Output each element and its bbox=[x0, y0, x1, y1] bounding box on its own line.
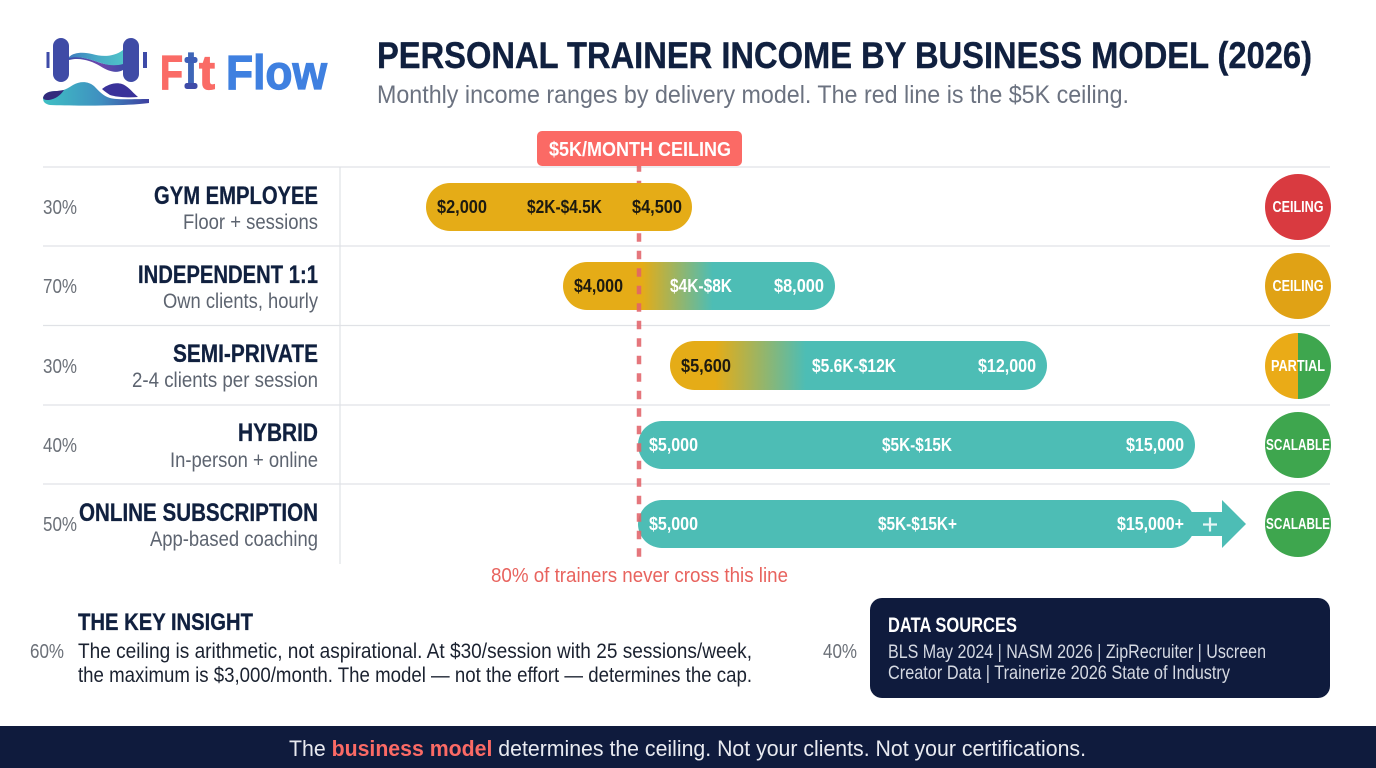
row label bbox=[170, 419, 318, 472]
income bar bbox=[563, 262, 835, 310]
insight body bbox=[78, 640, 752, 687]
row label: SEMI-PRIVATE bbox=[173, 340, 318, 368]
footer banner: The business model determines the ceiling. Not your clients. Not your certifications. bbox=[289, 736, 1086, 761]
row label bbox=[79, 499, 318, 551]
income bar bbox=[638, 421, 1195, 469]
income bar: $4,000 bbox=[574, 275, 623, 296]
income bar: $5K-$15K bbox=[882, 434, 953, 455]
status badge: CEILING bbox=[1272, 199, 1324, 216]
income bar: $5,600 bbox=[681, 355, 731, 376]
income bar bbox=[670, 341, 1047, 390]
logo wordmark: i bbox=[186, 46, 196, 99]
ceiling line bbox=[637, 163, 641, 557]
row label: In-person + online bbox=[170, 449, 318, 472]
percent: 70% bbox=[43, 276, 77, 298]
logo wordmark: Flow bbox=[226, 47, 328, 100]
row label: App-based coaching bbox=[150, 528, 318, 551]
icon: dumbbell with flow waves bbox=[43, 38, 149, 106]
status badge bbox=[1265, 174, 1331, 240]
percent: 30% bbox=[43, 197, 77, 219]
income bar with arrow: $5,000 bbox=[649, 513, 698, 534]
logo: FitFlow bbox=[43, 38, 328, 106]
percent: 50% bbox=[43, 514, 77, 536]
row label bbox=[138, 261, 318, 313]
income bar with arrow bbox=[638, 500, 1246, 548]
ceiling label: $5K/MONTH CEILING bbox=[549, 138, 731, 161]
row: hybrid bbox=[43, 412, 1331, 478]
footer banner bbox=[0, 726, 1376, 768]
income bar: $4,500 bbox=[632, 196, 682, 217]
sources percent: 40% bbox=[823, 641, 857, 663]
status badge: SCALABLE bbox=[1266, 516, 1330, 533]
ceiling note: 80% of trainers never cross this line bbox=[491, 565, 788, 587]
income bar: $2K-$4.5K bbox=[527, 196, 603, 217]
row label bbox=[132, 340, 318, 392]
row: gym employee bbox=[43, 174, 1331, 240]
panel: data sources: DATA SOURCES bbox=[888, 614, 1017, 637]
status badge bbox=[1265, 491, 1331, 557]
row: semi-private bbox=[43, 333, 1331, 399]
panel: data sources: BLS May 2024 | NASM 2026 | ZipRecruiter | Uscreen bbox=[888, 641, 1266, 663]
row label: GYM EMPLOYEE bbox=[154, 182, 318, 210]
status badge: SCALABLE bbox=[1266, 437, 1330, 454]
row: independent bbox=[43, 253, 1331, 319]
logo wordmark: t bbox=[199, 47, 215, 100]
status badge: PARTIAL bbox=[1271, 358, 1325, 375]
income bar: $15,000 bbox=[1126, 434, 1184, 455]
income bar with arrow: $5K-$15K+ bbox=[878, 513, 957, 534]
income bar: $5,000 bbox=[649, 434, 698, 455]
income bar: $2,000 bbox=[437, 196, 487, 217]
row label: Own clients, hourly bbox=[163, 290, 318, 313]
income bar: $12,000 bbox=[978, 355, 1036, 376]
income bar: $5.6K-$12K bbox=[812, 355, 897, 376]
status badge: CEILING bbox=[1272, 278, 1324, 295]
insight body: the maximum is $3,000/month. The model — not the effort — determines the cap. bbox=[78, 664, 752, 687]
row label: Floor + sessions bbox=[183, 211, 318, 234]
row label: HYBRID bbox=[238, 419, 318, 447]
panel: data sources bbox=[870, 598, 1330, 698]
status badge bbox=[1265, 412, 1331, 478]
insight body: The ceiling is arithmetic, not aspirational. At $30/session with 25 sessions/week, bbox=[78, 640, 752, 663]
income bar bbox=[426, 183, 692, 231]
income bar: $4K-$8K bbox=[670, 275, 733, 296]
row label: 2-4 clients per session bbox=[132, 369, 318, 392]
row label bbox=[154, 182, 318, 234]
percent: 30% bbox=[43, 356, 77, 378]
income bar with arrow: $15,000+ bbox=[1117, 513, 1184, 534]
status badge bbox=[1265, 333, 1331, 399]
ceiling label bbox=[537, 131, 742, 166]
insight heading: THE KEY INSIGHT bbox=[78, 609, 253, 636]
key insight bbox=[30, 609, 752, 687]
row: online subscription bbox=[43, 491, 1331, 557]
income bar: $8,000 bbox=[774, 275, 824, 296]
insight percent: 60% bbox=[30, 641, 64, 663]
status badge bbox=[1265, 253, 1331, 319]
panel: data sources: Creator Data | Trainerize 2026 State of Industry bbox=[888, 662, 1230, 684]
row label: INDEPENDENT 1:1 bbox=[138, 261, 318, 289]
row label: ONLINE SUBSCRIPTION bbox=[79, 499, 318, 527]
percent: 40% bbox=[43, 435, 77, 457]
logo wordmark bbox=[160, 46, 328, 100]
subtitle: Monthly income ranges by delivery model. The red line is the $5K ceiling. bbox=[377, 81, 1129, 109]
logo wordmark: F bbox=[160, 47, 183, 100]
